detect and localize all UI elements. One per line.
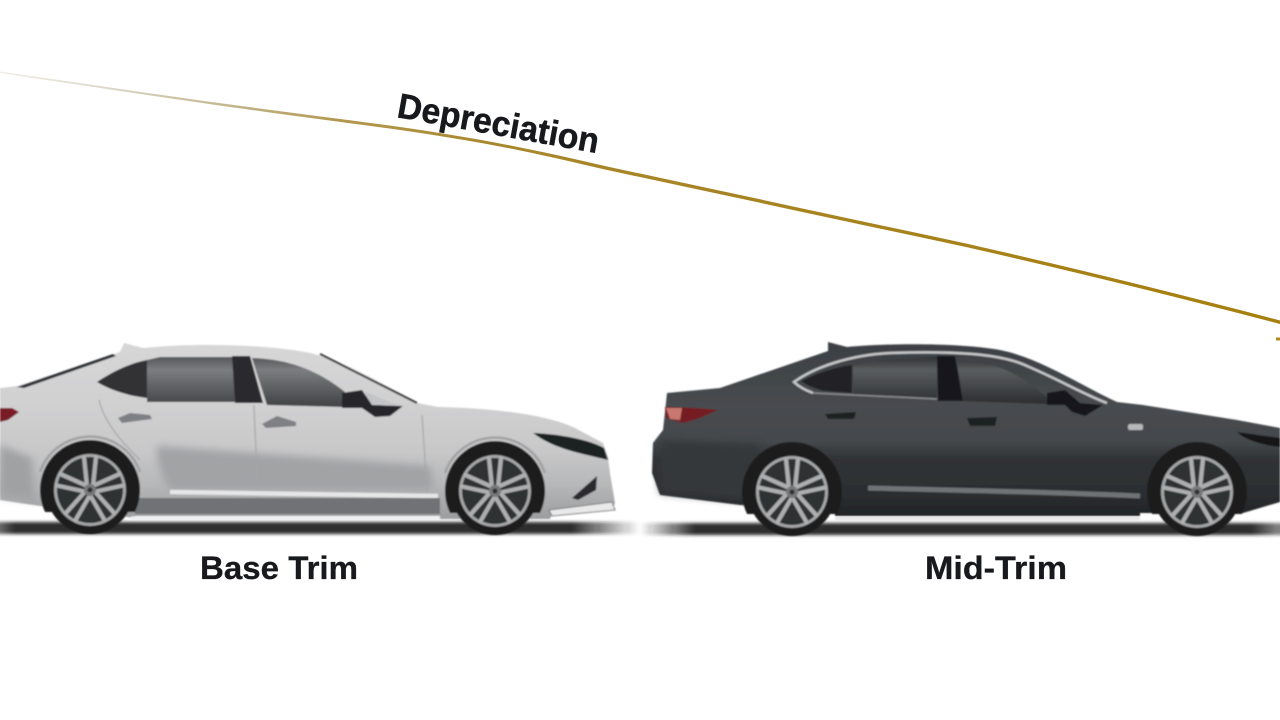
label: Base Trim: Base Trim bbox=[200, 550, 358, 586]
label: Mid-Trim: Mid-Trim bbox=[925, 550, 1067, 586]
silver car headlight bbox=[533, 433, 608, 460]
depreciation trend line bbox=[0, 72, 1280, 324]
dark car taillight bbox=[665, 407, 718, 423]
silver car door handles bbox=[118, 413, 296, 428]
ground shadow under silver car bbox=[0, 522, 640, 534]
dark car front wheel bbox=[1147, 442, 1247, 536]
ground shadow under dark car bbox=[640, 523, 1280, 535]
dark car door handles bbox=[825, 412, 997, 426]
dark car front window bbox=[957, 362, 1047, 404]
dark car rear quarter window bbox=[801, 365, 852, 393]
silver car taillight bbox=[0, 408, 19, 422]
dark car window chrome bbox=[794, 352, 1107, 403]
dark car rear wheel bbox=[742, 442, 842, 536]
dark car taillight highlight bbox=[666, 408, 682, 420]
silver car body bbox=[0, 343, 615, 519]
dark car sill highlight bbox=[868, 488, 1140, 496]
dark car rear bumper tone bbox=[660, 440, 760, 500]
silver car rear quarter window bbox=[97, 360, 147, 398]
silver car rear wheel bbox=[40, 440, 140, 534]
depreciation label: Depreciation bbox=[395, 86, 602, 161]
silver car sill highlight bbox=[170, 492, 438, 496]
silver car door pillar bbox=[232, 356, 263, 403]
arrow tip fragment bbox=[1276, 338, 1280, 340]
silver car front vent bbox=[572, 476, 597, 500]
silver car windshield edge bbox=[320, 354, 417, 403]
silver car chrome strip bbox=[131, 516, 440, 520]
silver car front splitter bbox=[549, 502, 615, 516]
silver car lower sill bbox=[135, 498, 440, 514]
car: dark mid trim bbox=[652, 342, 1280, 536]
dark car body bbox=[652, 342, 1280, 516]
dark car lower chrome strip bbox=[835, 517, 1140, 520]
silver car front quarter glass bbox=[366, 392, 397, 405]
silver car mirror bbox=[342, 390, 403, 417]
dark car headlight bbox=[1237, 432, 1280, 447]
silver car front window bbox=[252, 358, 345, 407]
silver car door seams bbox=[99, 400, 428, 505]
silver car wheel arch lip bbox=[40, 437, 545, 473]
silver car rear bumper shading bbox=[0, 445, 34, 500]
silver car rear window strip bbox=[17, 354, 116, 388]
silver car front wheel bbox=[445, 441, 545, 535]
car: silver base trim bbox=[0, 343, 615, 535]
dark car badge bbox=[1128, 424, 1143, 430]
dark car lower window trim bbox=[813, 393, 937, 399]
dark car side window bbox=[853, 357, 937, 398]
silver car side window bbox=[147, 357, 235, 402]
silver car door shading bbox=[157, 446, 434, 490]
dark car mirror bbox=[1047, 390, 1103, 416]
dark car door pillar bbox=[937, 356, 963, 401]
